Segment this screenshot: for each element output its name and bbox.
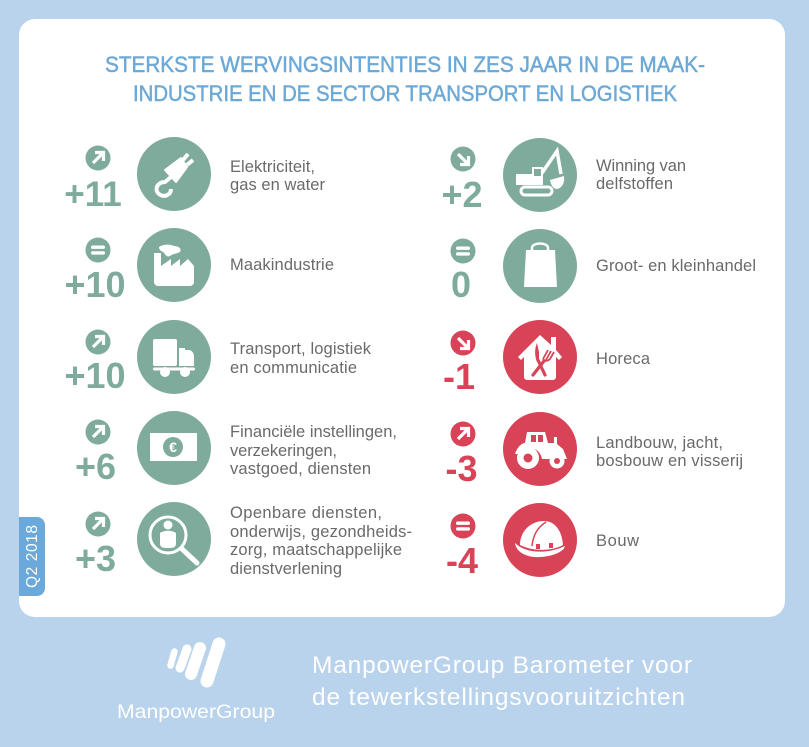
value: -3 xyxy=(445,448,478,489)
tab: quarter label xyxy=(19,517,45,596)
label: bosbouw en visserij xyxy=(596,452,743,470)
title: INDUSTRIE EN DE SECTOR TRANSPORT EN LOGISTIEK xyxy=(133,81,677,106)
value: +11 xyxy=(64,175,122,214)
value: 0 xyxy=(451,264,471,305)
label: gas en water xyxy=(230,176,326,194)
title: STERKSTE WERVINGSINTENTIES IN ZES JAAR IN DE MAAK- xyxy=(105,52,705,77)
label: dienstverlening xyxy=(230,560,342,578)
value: -4 xyxy=(446,540,478,581)
label: Landbouw, jacht, xyxy=(596,434,723,452)
icon: truck xyxy=(137,320,211,394)
row: Openbare diensten +3 xyxy=(75,502,412,579)
label: Financiële instellingen, xyxy=(230,423,397,441)
title xyxy=(105,52,705,106)
row: Landbouw -3 xyxy=(445,412,743,489)
label: vastgoed, diensten xyxy=(230,460,371,478)
trend badge: up xyxy=(450,422,476,446)
icon: banknote xyxy=(137,411,211,485)
label xyxy=(596,157,686,193)
row: Winning van delfstoffen +2 xyxy=(441,138,686,215)
row: Horeca -1 xyxy=(443,320,651,397)
row: Groot- en kleinhandel 0 xyxy=(450,229,756,305)
row: Elektriciteit +11 xyxy=(64,137,326,214)
row: Maakindustrie +10 xyxy=(64,228,334,305)
trend badge: equal xyxy=(450,238,476,264)
label xyxy=(230,158,326,194)
row: Bouw -4 xyxy=(446,503,639,581)
trend badge: up xyxy=(86,512,110,536)
value: +6 xyxy=(75,446,116,487)
label xyxy=(596,434,743,470)
footer text: ManpowerGroup Barometer voor xyxy=(312,652,692,679)
label: Maakindustrie xyxy=(230,256,334,274)
value: +2 xyxy=(441,174,483,215)
icon: plug xyxy=(137,137,211,211)
icon: magnifier with person xyxy=(137,502,211,576)
label: Openbare diensten, xyxy=(230,504,382,522)
icon: shopping bag xyxy=(503,229,577,303)
label xyxy=(230,504,412,578)
label: Groot- en kleinhandel xyxy=(596,257,756,275)
label xyxy=(230,340,372,377)
value: +3 xyxy=(75,538,116,579)
footer text xyxy=(312,652,692,711)
icon: excavator xyxy=(503,138,577,212)
icon: tractor xyxy=(503,412,577,486)
trend badge: equal xyxy=(450,514,476,538)
trend badge: equal xyxy=(86,238,110,262)
label: zorg, maatschappelijke xyxy=(230,541,402,559)
logo mark: stripes xyxy=(170,644,219,681)
icon: house with cutlery xyxy=(503,320,577,394)
row: Transport +10 xyxy=(64,320,372,396)
icon: factory xyxy=(137,228,211,302)
icon: banknote: € xyxy=(169,439,177,455)
value: +10 xyxy=(64,355,126,396)
value: -1 xyxy=(443,356,475,397)
label: Elektriciteit, xyxy=(230,158,315,176)
trend badge: up xyxy=(86,420,110,444)
footer text: de tewerkstellingsvooruitzichten xyxy=(312,684,685,711)
icon: hard hat xyxy=(503,503,577,577)
trend badge: up xyxy=(86,146,110,170)
trend badge: up xyxy=(86,330,110,354)
label: Winning van xyxy=(596,157,686,175)
label: en communicatie xyxy=(230,359,357,377)
label xyxy=(230,423,397,478)
trend badge: down xyxy=(450,146,476,172)
label: Bouw xyxy=(596,532,639,550)
panel: white card xyxy=(19,19,785,617)
logo wordmark: ManpowerGroup xyxy=(117,701,275,723)
row: Financiële instellingen +6 xyxy=(75,411,397,487)
value: +10 xyxy=(64,264,126,305)
label: delfstoffen xyxy=(596,175,673,193)
label: Transport, logistiek xyxy=(230,340,372,358)
tab: quarter label: Q2 2018 xyxy=(24,525,41,588)
logo: ManpowerGroup xyxy=(117,644,275,723)
label: verzekeringen, xyxy=(230,442,337,460)
label: onderwijs, gezondheids- xyxy=(230,523,412,541)
trend badge: down xyxy=(450,330,476,356)
label: Horeca xyxy=(596,350,651,368)
